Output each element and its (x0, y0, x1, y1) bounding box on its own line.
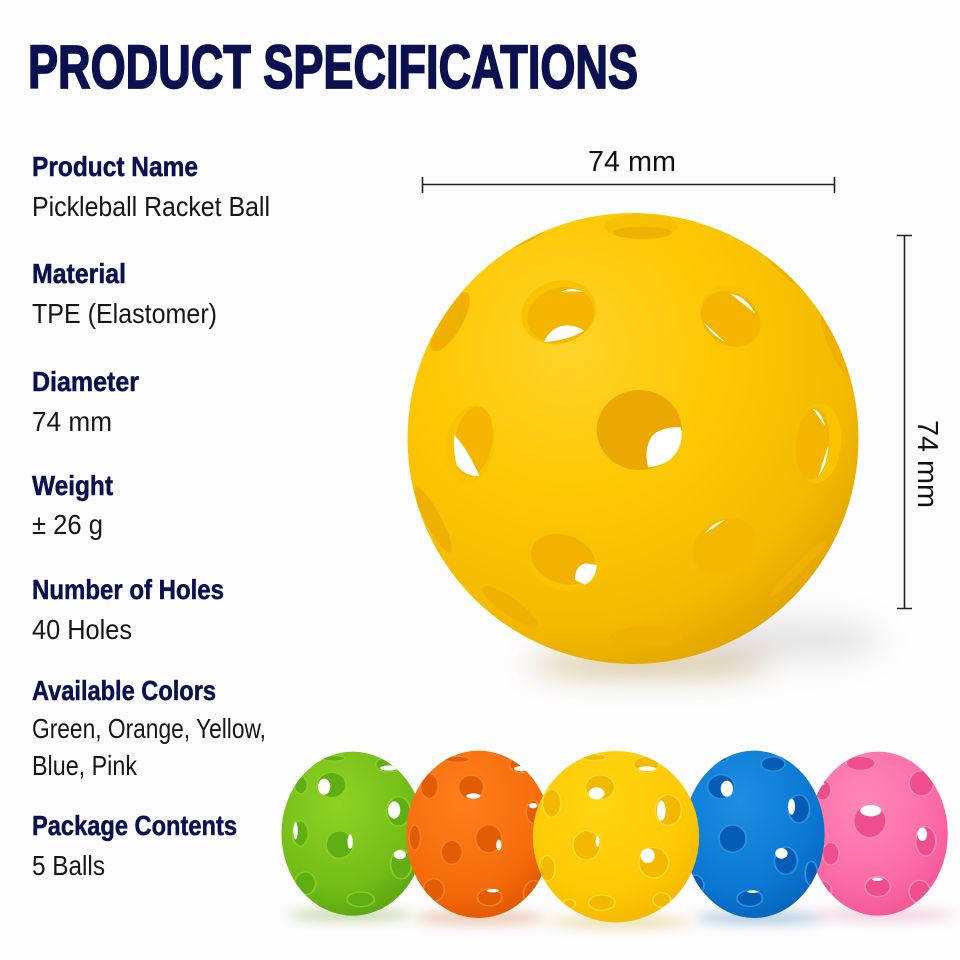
right hole (796, 408, 841, 483)
spec: available colors: Available Colors (32, 675, 216, 706)
lower left hole (531, 534, 597, 585)
large yellow ball (408, 213, 858, 664)
center hole (597, 390, 682, 470)
spec: weight: Weight (32, 470, 113, 501)
spec: product name: Pickleball Racket Ball (32, 191, 270, 222)
upper right hole (701, 290, 760, 346)
spec: diameter: Diameter (32, 366, 139, 397)
horizontal dimension: 74 mm (422, 146, 835, 193)
top hole (604, 215, 672, 239)
spec: weight (32, 470, 113, 540)
spec: weight: ± 26 g (32, 509, 103, 540)
horizontal dimension: 74 mm: 74 mm (588, 146, 676, 178)
lower right hole (705, 520, 725, 534)
spec: material: Material (32, 258, 126, 289)
vertical dimension: 74 mm: 74 mm (911, 420, 943, 508)
vertical dimension: 74 mm (897, 235, 943, 609)
spec: number of holes (32, 574, 224, 645)
spec: product name (32, 151, 270, 222)
specification list (32, 151, 270, 881)
spec: material (32, 258, 217, 329)
title: PRODUCT SPECIFICATIONS (28, 33, 638, 101)
spec: material: TPE (Elastomer) (32, 298, 217, 329)
spec: product name: Product Name (32, 151, 198, 182)
spec: number of holes: Number of Holes (32, 574, 224, 605)
spec: available colors (32, 675, 266, 781)
spec: package contents: 5 Balls (32, 850, 105, 881)
spec: available colors: Green, Orange, Yellow, (32, 713, 266, 744)
pink ball (809, 752, 948, 916)
orange ball (406, 751, 551, 918)
edge holes (409, 224, 857, 647)
spec: package contents: Package Contents (32, 810, 237, 841)
green ball (281, 752, 424, 916)
spec: number of holes: 40 Holes (32, 614, 132, 645)
left hole (454, 406, 494, 476)
large ball shadow (530, 620, 880, 676)
blue ball (684, 751, 825, 918)
spec: diameter: 74 mm (32, 406, 112, 437)
spec: diameter (32, 366, 139, 437)
yellow ball (533, 751, 699, 922)
row of five colored balls (281, 751, 948, 922)
spec: available colors: Blue, Pink (32, 750, 138, 781)
spec: package contents (32, 810, 237, 881)
upper left hole (521, 280, 596, 344)
small ball shadows (288, 910, 955, 927)
